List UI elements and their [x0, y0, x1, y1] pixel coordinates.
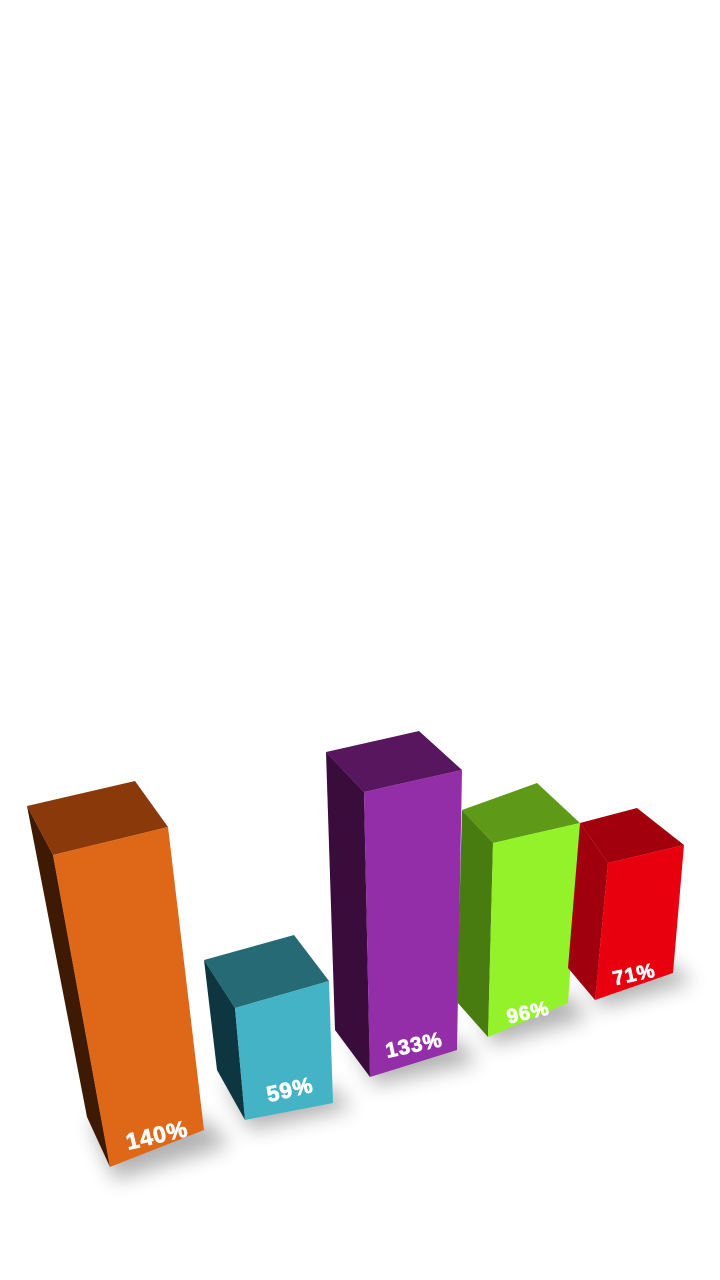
- bar: green 96%: 96%: [505, 997, 552, 1029]
- bar: purple 133%: 133%: [383, 1028, 445, 1063]
- bar: red 71%: 71%: [611, 960, 658, 990]
- bar: purple 133%: [326, 731, 462, 1077]
- bar: green 96%: [457, 783, 580, 1037]
- bar: teal 59%: 59%: [264, 1072, 316, 1107]
- bar: orange 140%: 140%: [123, 1115, 191, 1155]
- bar shadows: [90, 960, 692, 1180]
- bar: teal 59%: [204, 935, 333, 1120]
- bar: orange 140%: [27, 781, 204, 1167]
- bar: red 71%: [568, 808, 684, 1000]
